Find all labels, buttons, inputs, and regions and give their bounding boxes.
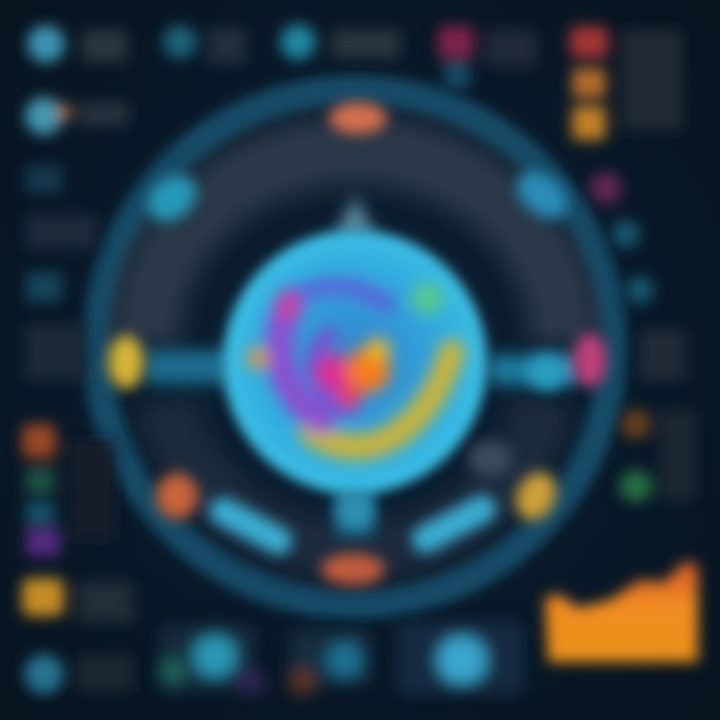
bottom icons <box>158 622 523 695</box>
central circle <box>223 230 487 494</box>
right column icons and labels <box>590 172 695 502</box>
central swirl chart <box>246 282 452 447</box>
connector spokes <box>145 195 580 535</box>
lower left legend <box>22 424 133 694</box>
top row icons and labels <box>27 24 682 140</box>
outer ring <box>98 90 612 604</box>
orange area chart <box>545 562 698 662</box>
inner dark band <box>145 150 565 551</box>
ring nodes <box>108 102 607 585</box>
left column icons and labels <box>25 97 128 380</box>
